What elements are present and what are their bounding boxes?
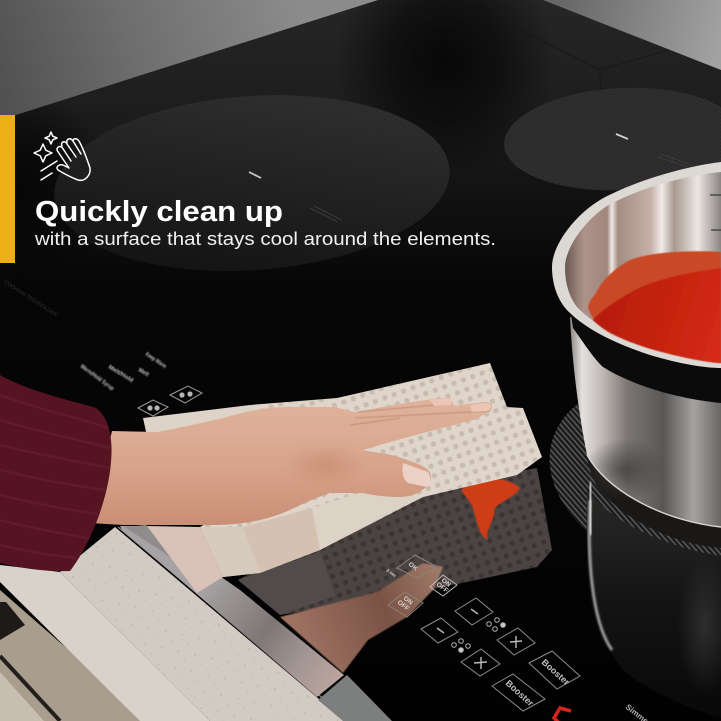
- control labels on left of glass: Warm/Hold Syrup: [79, 364, 115, 392]
- minus button rear: [455, 598, 493, 625]
- booster button front: [492, 674, 545, 711]
- towel pink reflection edge: [147, 526, 223, 593]
- control labels on left of glass: [79, 352, 167, 392]
- title: Quickly clean up: [35, 196, 283, 228]
- counter edge bottom left: [0, 527, 350, 721]
- hand: [90, 398, 492, 525]
- element selector front: [452, 639, 470, 652]
- control labels on left of glass: Melt/Hold: [107, 365, 134, 384]
- sauce top chunky layer: [588, 251, 721, 363]
- booster button front: Booster: [504, 678, 536, 709]
- pot interior wall: [565, 172, 721, 363]
- grey counter top right: [543, 0, 721, 70]
- booster button rear: [529, 651, 580, 689]
- red power display: [554, 708, 571, 721]
- burner: rear right: [501, 82, 721, 196]
- touch labels over reflection: ON: [402, 595, 414, 607]
- left accent bar: [0, 115, 15, 263]
- element selector rear: [487, 618, 505, 631]
- minus button front: [421, 618, 458, 643]
- oven handle: [0, 602, 25, 640]
- reflected towel lower band: [238, 552, 335, 615]
- reflection of towel and hand: [238, 468, 552, 673]
- control labels on left of glass: Keep Warm: [144, 352, 167, 370]
- touch labels over reflection: [385, 555, 457, 617]
- subtitle: with a surface that stays cool around the elements.: [34, 228, 496, 249]
- reflected towel: [238, 468, 552, 615]
- pot lower body: [570, 317, 721, 527]
- pot black band: [571, 315, 721, 403]
- towel plain band: [200, 527, 260, 577]
- grey counter top left: [0, 0, 378, 120]
- towel stitched band: [243, 508, 320, 573]
- touch control panel: [421, 598, 580, 711]
- red sauce smear: [461, 479, 520, 540]
- touch labels over reflection: ON: [440, 577, 452, 589]
- steel cooktop trim: [120, 525, 392, 721]
- oven front: [0, 590, 150, 721]
- icon: hand wiping with sparkles: [34, 132, 90, 180]
- control buttons on left of glass: [138, 386, 202, 416]
- burner ring under pot: [527, 346, 721, 614]
- booster button rear: Booster: [540, 657, 572, 688]
- counter front edge: [0, 565, 210, 721]
- reflected hand: [280, 563, 443, 673]
- plus button rear: [497, 628, 535, 655]
- fingernails: [430, 398, 491, 412]
- pot rim: [552, 162, 721, 368]
- sauce deep layer: [593, 268, 721, 363]
- touch labels over reflection: OFF: [396, 599, 410, 613]
- counter top face: [60, 527, 345, 721]
- measuring marks: [710, 195, 721, 230]
- oven door gap: [0, 656, 60, 721]
- control labels on left of glass: Melt: [137, 368, 150, 378]
- touch labels over reflection: OFF: [435, 581, 449, 595]
- pot reflection in glass: [587, 482, 721, 718]
- dark lower left body shadow: [583, 438, 667, 502]
- dark reflections in glass: [0, 0, 720, 300]
- terry back edge: [143, 405, 340, 470]
- cooking pot: [552, 162, 721, 548]
- waffle body: [200, 363, 542, 577]
- plus button front: [461, 649, 500, 676]
- touch labels over reflection: 3 sec: [385, 568, 398, 579]
- towel: [143, 363, 542, 593]
- towel plain band right: [312, 492, 420, 550]
- pot base: [586, 455, 721, 548]
- sweater sleeve: [0, 375, 112, 571]
- finger separations: [350, 404, 490, 425]
- thumbnail: [403, 463, 430, 487]
- burner: rear left: [48, 82, 456, 284]
- palm thumb crease shadow: [283, 443, 367, 487]
- pot white base line: [587, 455, 721, 527]
- touch labels over reflection: OK: [407, 561, 419, 573]
- brand strip text on glass: COOKING TECHNOLOGY: [3, 280, 59, 319]
